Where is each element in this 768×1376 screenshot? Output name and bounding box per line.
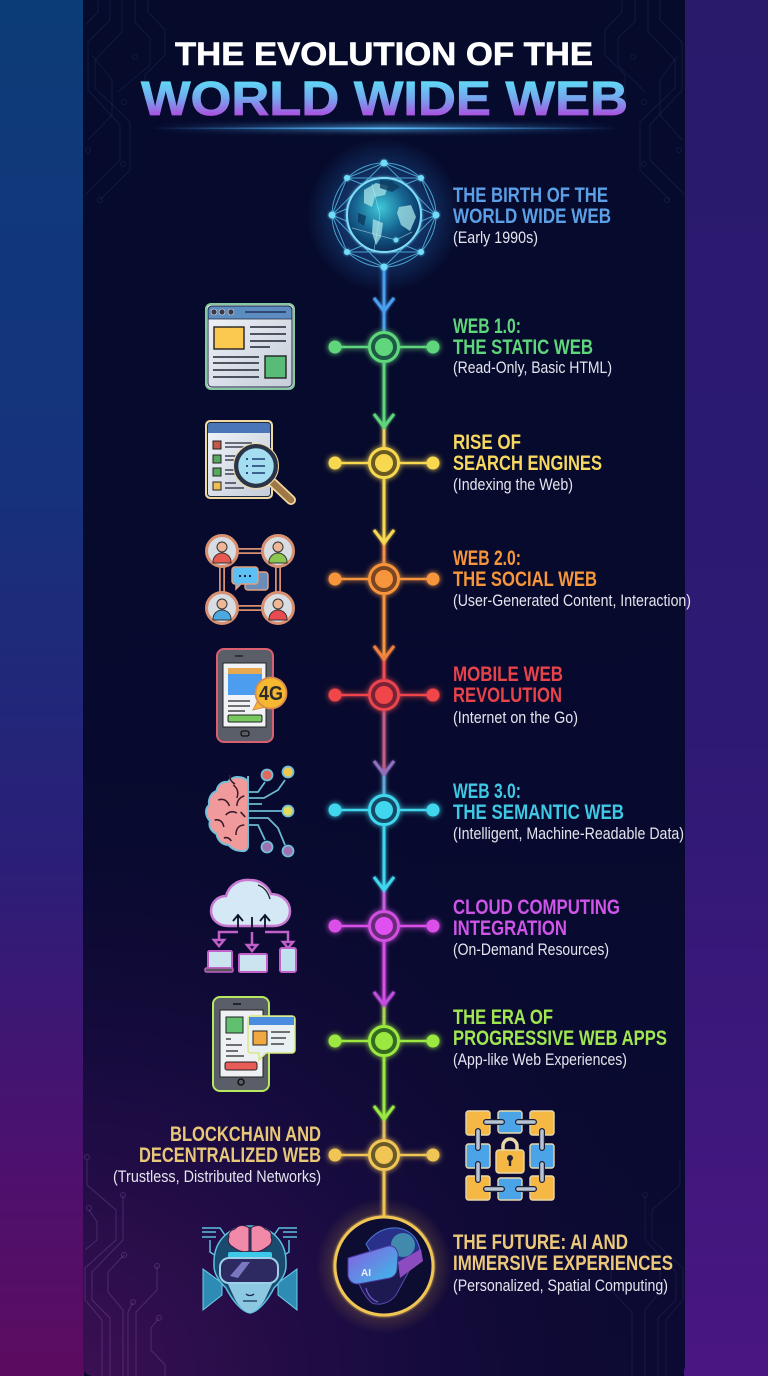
text: blockchain: (Trustless, Distributed Networks) (113, 1167, 321, 1186)
node: yellow (328, 448, 440, 478)
step 10: future of AI (202, 1198, 673, 1334)
icon: phone with app window (213, 997, 295, 1091)
text: search engines: (Indexing the Web) (453, 475, 573, 494)
text: mobile web: MOBILE WEB (453, 662, 563, 686)
step 4: web 2.0 (206, 536, 691, 624)
timeline connector lines (382, 268, 386, 1218)
title line two: WORLD WIDE WEB (141, 73, 628, 126)
text: search engines (453, 430, 602, 494)
text: web 2.0: (User-Generated Content, Interaction) (453, 591, 691, 610)
icon: AI VR medallion: AI (361, 1268, 371, 1279)
arrow: cyan (374, 877, 394, 890)
arrow: yellow (374, 530, 394, 543)
node: cyan (328, 796, 440, 824)
arrow: blue (374, 298, 394, 311)
icon: AI head with VR visor (202, 1225, 297, 1313)
text: search engines: RISE OF (453, 430, 521, 454)
text: future of AI (453, 1230, 673, 1295)
text: future of AI: (Personalized, Spatial Computing) (453, 1276, 668, 1295)
text: future of AI: IMMERSIVE EXPERIENCES (453, 1251, 673, 1275)
text: progressive web apps (453, 1005, 667, 1069)
text: web 1.0 (453, 314, 612, 377)
text: cloud computing: (On-Demand Resources) (453, 940, 609, 959)
text: web 1.0: WEB 1.0: (453, 314, 521, 338)
icon: cloud with devices (205, 880, 296, 972)
icon: phone with 4G bubble (217, 649, 286, 742)
node: green (328, 332, 440, 362)
step 1: birth of the web (306, 137, 611, 293)
title line one: THE EVOLUTION OF THE (175, 36, 593, 72)
step 9: blockchain (113, 1111, 554, 1200)
text: web 3.0: WEB 3.0: (453, 779, 521, 803)
text: progressive web apps: (App-like Web Experiences) (453, 1050, 627, 1069)
circuit decoration: top left (85, 0, 165, 202)
text: web 1.0: (Read-Only, Basic HTML) (453, 358, 612, 377)
text: web 1.0: THE STATIC WEB (453, 335, 593, 359)
text: web 2.0 (453, 546, 691, 610)
icon: static web page (206, 304, 294, 389)
icon: social network people (206, 536, 294, 624)
circuit decoration: bottom left (84, 1154, 165, 1376)
text: web 3.0: THE SEMANTIC WEB (453, 800, 624, 824)
node: lime (328, 1026, 440, 1056)
icon: AI VR medallion (316, 1198, 452, 1334)
text: blockchain: DECENTRALIZED WEB (139, 1143, 321, 1167)
title (141, 36, 628, 126)
step 3: search engines (206, 421, 602, 500)
text: future of AI: THE FUTURE: AI AND (453, 1230, 628, 1254)
text: web 2.0: THE SOCIAL WEB (453, 567, 597, 591)
node: magenta (328, 912, 440, 940)
step 2: web 1.0 (206, 304, 612, 389)
node: red (328, 680, 440, 710)
icon: globe with network (306, 137, 462, 293)
circuit decoration: top right (605, 0, 685, 202)
arrow: green (374, 414, 394, 427)
text: cloud computing: CLOUD COMPUTING (453, 895, 620, 919)
title underline glow (150, 125, 620, 131)
text: progressive web apps: PROGRESSIVE WEB APPS (453, 1026, 667, 1050)
step 6: web 3.0 (206, 766, 684, 856)
text: blockchain: BLOCKCHAIN AND (170, 1122, 321, 1146)
icon: phone with 4G bubble: 4G (259, 683, 283, 705)
text: cloud computing (453, 895, 620, 959)
page background left (0, 0, 84, 1376)
text: birth of the web (453, 183, 611, 247)
text: web 3.0: (Intelligent, Machine-Readable Data) (453, 824, 684, 843)
arrow: magenta (374, 992, 394, 1005)
text: cloud computing: INTEGRATION (453, 916, 567, 940)
text: mobile web (453, 662, 578, 727)
circuit decoration: bottom right (608, 1160, 683, 1376)
arrow: orange (374, 646, 394, 659)
node: orange (328, 564, 440, 594)
icon: blockchain lock (466, 1111, 554, 1200)
text: mobile web: (Internet on the Go) (453, 708, 578, 727)
text: mobile web: REVOLUTION (453, 683, 562, 707)
text: birth of the web: WORLD WIDE WEB (453, 204, 611, 228)
text: progressive web apps: THE ERA OF (453, 1005, 553, 1029)
step 7: cloud computing (205, 880, 620, 972)
icon: brain circuit (206, 766, 294, 856)
text: search engines: SEARCH ENGINES (453, 451, 602, 475)
arrow: lime (374, 1106, 394, 1119)
text: birth of the web: THE BIRTH OF THE (453, 183, 608, 207)
step 8: progressive web apps (213, 997, 667, 1091)
icon: search magnifier over document (206, 421, 291, 500)
text: web 2.0: WEB 2.0: (453, 546, 521, 570)
central dark panel (83, 0, 685, 1376)
node: gold (328, 1140, 440, 1170)
text: birth of the web: (Early 1990s) (453, 228, 538, 247)
arrow: violet (374, 761, 394, 774)
text: web 3.0 (453, 779, 684, 843)
text: blockchain (113, 1122, 321, 1186)
page background right (684, 0, 768, 1376)
step 5: mobile web (217, 649, 578, 742)
